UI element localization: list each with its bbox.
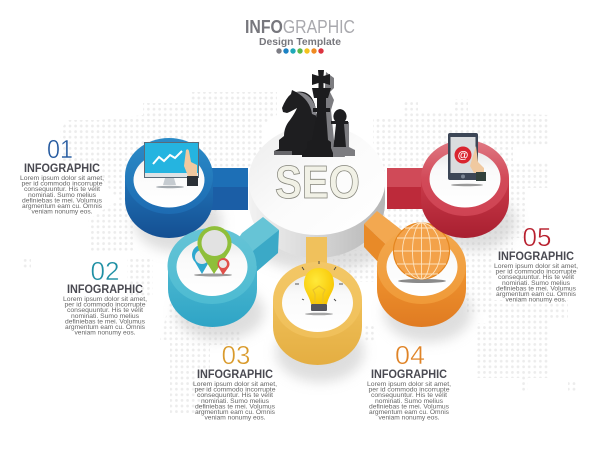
body 01: veniam nonumy eos.: [32, 209, 93, 216]
body 02: argmentum eam cu. Omnis: [65, 324, 145, 331]
body 03: argmentum eam cu. Omnis: [195, 409, 275, 416]
body 01: definiebas te mei. Volumus: [22, 197, 102, 204]
number 01: 01: [47, 136, 73, 164]
text block 05: [494, 224, 578, 304]
body 04: consequuntur. His te velit: [371, 392, 447, 399]
panel: blue cylinder: [125, 138, 213, 238]
body 02: [63, 296, 147, 337]
body 01: consequuntur. His te velit: [24, 186, 100, 193]
icon: monitor with hand: [144, 142, 199, 188]
title: infographic: INFOGRAPHIC: [245, 16, 355, 37]
number 04: 04: [395, 342, 425, 370]
panel: orange cylinder: [377, 228, 466, 327]
pawn: [331, 109, 348, 147]
body 02: consequuntur. His te velit: [67, 307, 143, 314]
panel: yellow cylinder: [273, 262, 362, 365]
heading 02: INFOGRAPHIC: [67, 282, 143, 296]
bulb rays: [295, 261, 343, 301]
body 01: argmentum eam cu. Omnis: [22, 203, 102, 210]
text block 02: [63, 258, 147, 337]
text block 04: [367, 342, 451, 422]
text block 01: [20, 136, 104, 216]
icon: tablet with hand: @: [458, 150, 469, 162]
body 04: definiebas te mei. Volumus: [369, 403, 449, 410]
icon: globe: [394, 223, 450, 283]
body 05: argmentum eam cu. Omnis: [496, 291, 576, 298]
hand: [184, 149, 197, 176]
body 03: definiebas te mei. Volumus: [195, 403, 275, 410]
body 04: argmentum eam cu. Omnis: [369, 409, 449, 416]
heading 04: INFOGRAPHIC: [371, 367, 447, 381]
title: [245, 16, 355, 54]
body 01: nominati. Sumo melius: [28, 192, 96, 199]
connector: orange: [364, 211, 408, 264]
body 04: veniam nonumy eos.: [378, 415, 440, 422]
number 03: 03: [222, 342, 250, 370]
body 04: nominati. Sumo melius: [375, 398, 443, 405]
king: [302, 70, 333, 157]
blue pin: [192, 245, 212, 274]
body 04: [367, 381, 451, 422]
body 02: per id commodo incorrupte: [64, 302, 146, 309]
body 05: consequuntur. His te velit: [498, 274, 574, 281]
body 02: Lorem ipsum dolor sit amet,: [63, 296, 147, 303]
body 05: per id commodo incorrupte: [496, 269, 577, 276]
panel: teal cylinder: [168, 228, 257, 327]
central SEO disc: [248, 125, 386, 258]
body 02: definiebas te mei. Volumus: [65, 318, 145, 325]
king shadow: [320, 72, 345, 157]
number 05: 05: [522, 224, 552, 252]
body 03: consequuntur. His te velit: [197, 392, 273, 399]
body 01: per id commodo incorrupte: [22, 181, 103, 188]
body 03: per id commodo incorrupte: [194, 387, 276, 394]
heading 03: INFOGRAPHIC: [197, 367, 273, 381]
body 03: [193, 381, 277, 422]
knight: [274, 90, 317, 155]
connector: yellow: [306, 237, 327, 277]
heading 01: INFOGRAPHIC: [24, 161, 100, 175]
body 05: nominati. Sumo melius: [502, 280, 570, 287]
body 03: veniam nonumy eos.: [204, 415, 266, 422]
body 05: [494, 263, 578, 304]
pawn shadow: [337, 122, 355, 156]
colour dots: [276, 48, 324, 54]
body 04: Lorem ipsum dolor sit amet,: [367, 381, 451, 388]
green pin: [198, 226, 232, 274]
red pin: [218, 258, 230, 275]
body 04: per id commodo incorrupte: [368, 387, 450, 394]
body 02: veniam nonumy eos.: [74, 330, 136, 337]
connector: blue: [205, 168, 248, 210]
body 01: [20, 175, 104, 216]
soft shadows: [134, 192, 516, 382]
body 01: Lorem ipsum dolor sit amet,: [20, 175, 104, 182]
chess pieces icon: [274, 70, 355, 157]
icon: map pins: [192, 226, 232, 276]
connector: red: [387, 168, 426, 209]
heading 05: INFOGRAPHIC: [498, 249, 574, 263]
body 03: nominati. Sumo melius: [201, 398, 269, 405]
text block 03: [193, 342, 277, 422]
icon: tablet with hand: [448, 133, 486, 186]
number 02: 02: [90, 258, 120, 286]
icon: light bulb: [295, 261, 343, 315]
chart arrow: [153, 151, 182, 164]
body 02: nominati. Sumo melius: [71, 313, 139, 320]
connector: teal: [232, 217, 279, 273]
at sign badge: [454, 146, 472, 164]
subtitle: Design Template: [259, 36, 341, 48]
SEO text: SEO: [275, 156, 360, 208]
panel: red cylinder: [421, 140, 509, 238]
body 05: definiebas te mei. Volumus: [496, 285, 576, 292]
body 05: Lorem ipsum dolor sit amet,: [494, 263, 578, 270]
hand: [470, 146, 484, 173]
dotted world map background: [22, 92, 578, 413]
body 05: veniam nonumy eos.: [506, 297, 567, 304]
body 03: Lorem ipsum dolor sit amet,: [193, 381, 277, 388]
